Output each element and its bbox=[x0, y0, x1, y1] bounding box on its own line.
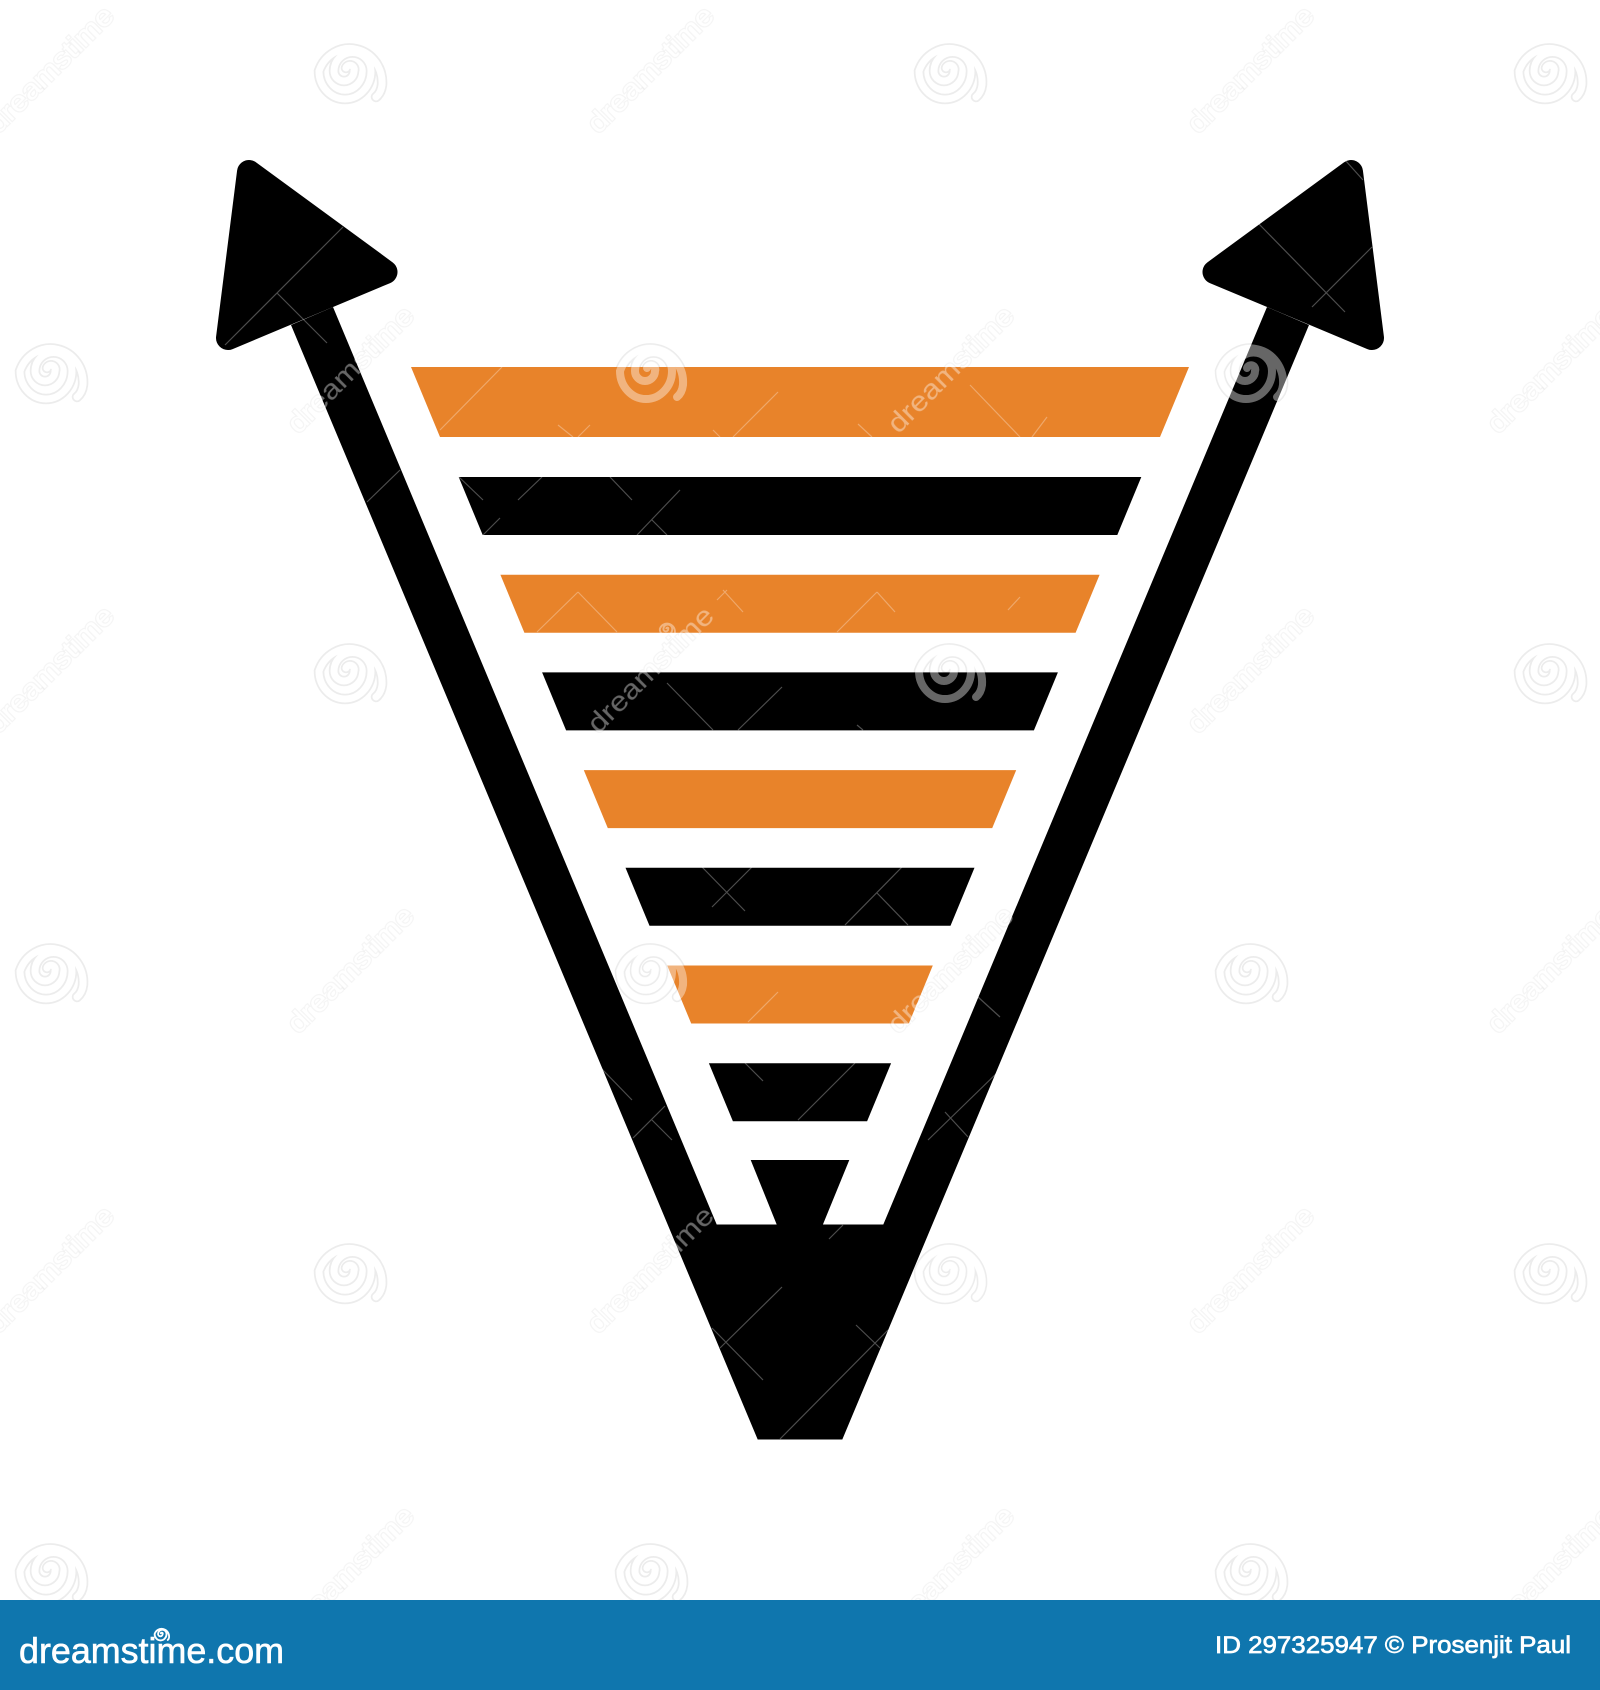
bar 5 orange bbox=[584, 770, 1016, 828]
faint watermark wordmarks: dreamstime bbox=[881, 900, 1020, 1039]
bar 2 black bbox=[459, 477, 1141, 535]
banner background bbox=[0, 1600, 1600, 1690]
left arrowhead bbox=[228, 172, 386, 338]
faint watermark wordmarks: dreamstime bbox=[581, 0, 720, 139]
right arrowhead bbox=[1214, 172, 1372, 338]
faint watermark wordmarks: dreamstime bbox=[881, 1500, 1020, 1639]
faint watermark wordmarks: dreamstime bbox=[1181, 1200, 1320, 1339]
funnel bars bbox=[411, 367, 1189, 1226]
bar 1 orange bbox=[411, 367, 1189, 437]
image id and credit: ID 297325947 © Prosenjit Paul bbox=[1215, 1632, 1571, 1659]
bar 8 black bbox=[709, 1063, 891, 1121]
watermark wordmarks: dreamstime bbox=[881, 300, 1020, 439]
bar 3 orange bbox=[500, 575, 1100, 633]
V-shaped arrow outline bbox=[228, 172, 1372, 1440]
watermark spirals bbox=[360, 324, 1283, 1299]
faint watermark wordmarks: dreamstime bbox=[281, 1500, 420, 1639]
watermark wordmarks: dreamstime bbox=[1181, 1200, 1320, 1339]
bar 7 orange bbox=[667, 966, 933, 1024]
bar 6 black bbox=[626, 868, 974, 926]
watermark hairlines bbox=[225, 160, 1372, 1439]
watermark wordmarks bbox=[281, 300, 1320, 1339]
faint watermark wordmarks: dreamstime bbox=[581, 600, 720, 739]
watermark wordmarks: dreamstime bbox=[1181, 600, 1320, 739]
V shafts and base bbox=[291, 307, 1309, 1440]
footer banner bbox=[0, 1600, 1600, 1690]
bar 4 black bbox=[542, 672, 1058, 730]
faint watermark wordmarks: dreamstime bbox=[881, 300, 1020, 439]
watermark wordmarks: dreamstime bbox=[581, 600, 720, 739]
faint watermark wordmarks: dreamstime bbox=[581, 1200, 720, 1339]
faint watermark wordmarks: dreamstime bbox=[1181, 0, 1320, 139]
logo spiral icon bbox=[155, 1629, 169, 1640]
watermark wordmarks: dreamstime bbox=[281, 900, 420, 1039]
watermark wordmarks: dreamstime bbox=[581, 1200, 720, 1339]
faint watermark wordmarks: dreamstime bbox=[281, 300, 420, 439]
watermark over shapes bbox=[225, 160, 1372, 1439]
watermark wordmarks: dreamstime bbox=[881, 900, 1020, 1039]
bar 9 black joined to base bbox=[751, 1160, 849, 1226]
faint watermark wordmarks: dreamstime bbox=[1181, 600, 1320, 739]
dreamstime logo text: dreamstime.com bbox=[19, 1630, 284, 1671]
watermark wordmarks: dreamstime bbox=[281, 300, 420, 439]
faint watermark wordmarks: dreamstime bbox=[281, 900, 420, 1039]
